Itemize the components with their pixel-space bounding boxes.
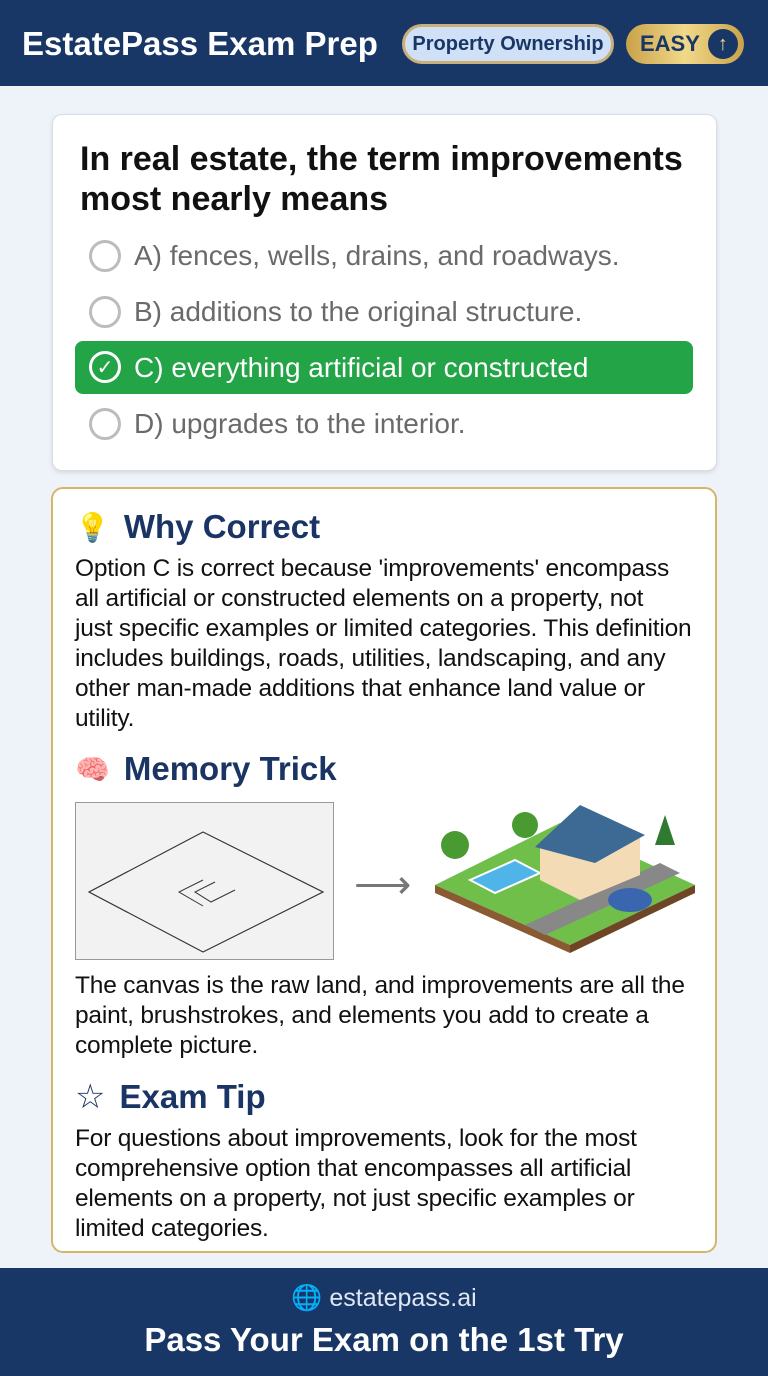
image: improved property — [435, 805, 695, 953]
text: why correct: just specific examples or limited categories. This definition — [75, 615, 691, 642]
badge: difficulty — [626, 24, 744, 64]
text: exam tip — [75, 1125, 637, 1242]
heading: memory trick: Memory Trick — [124, 750, 337, 787]
heading: exam tip: Exam Tip — [119, 1078, 266, 1115]
text: exam tip: limited categories. — [75, 1215, 269, 1242]
text: why correct: includes buildings, roads, utilities, landscaping, and any — [75, 645, 665, 672]
footer url: 🌐 estatepass.ai — [291, 1284, 477, 1312]
heading: why correct: Why Correct — [124, 508, 320, 545]
text: memory trick — [75, 972, 685, 1059]
heading: exam tip: ☆ — [75, 1078, 105, 1116]
heading: why correct: 💡 — [75, 512, 110, 542]
question text: most nearly means — [80, 180, 388, 218]
image: raw land canvas — [75, 802, 334, 960]
text: memory trick: paint, brushstrokes, and elements you add to create a — [75, 1002, 649, 1029]
footer — [0, 1268, 768, 1376]
arrow: ⟶ — [354, 863, 411, 907]
panel: explanation — [51, 487, 717, 1253]
question text: In real estate, the term improvements — [80, 140, 683, 178]
badge: category — [402, 24, 614, 64]
text: why correct: utility. — [75, 705, 134, 732]
option A: A) fences, wells, drains, and roadways. — [134, 240, 620, 271]
option C correct: C) everything artificial or constructed — [134, 352, 588, 382]
text: exam tip: comprehensive option that encompasses all artificial — [75, 1155, 631, 1182]
text: why correct: all artificial or constructed elements on a property, not — [75, 585, 643, 612]
option B: B) additions to the original structure. — [134, 296, 582, 327]
text: why correct: other man-made additions that enhance land value or — [75, 675, 645, 702]
question text — [80, 140, 683, 218]
badge: difficulty: ↑ — [718, 32, 728, 54]
heading: memory trick: 🧠 — [75, 754, 110, 784]
title: EstatePass Exam Prep — [22, 25, 378, 62]
badge: category: Property Ownership — [412, 32, 604, 54]
badge: difficulty: EASY — [640, 31, 700, 56]
option C correct: ✓ — [97, 356, 113, 378]
footer tagline: Pass Your Exam on the 1st Try — [144, 1321, 624, 1358]
header — [0, 0, 768, 86]
text: memory trick: complete picture. — [75, 1032, 258, 1059]
text: why correct: Option C is correct because 'improvements' encompass — [75, 555, 669, 582]
option C correct — [75, 341, 693, 394]
text: exam tip: elements on a property, not just specific examples or — [75, 1185, 635, 1212]
text: memory trick: The canvas is the raw land, and improvements are all the — [75, 972, 685, 999]
panel: question — [52, 114, 717, 471]
option D: D) upgrades to the interior. — [134, 408, 466, 439]
text: exam tip: For questions about improvements, look for the most — [75, 1125, 637, 1152]
text: why correct — [74, 555, 691, 732]
